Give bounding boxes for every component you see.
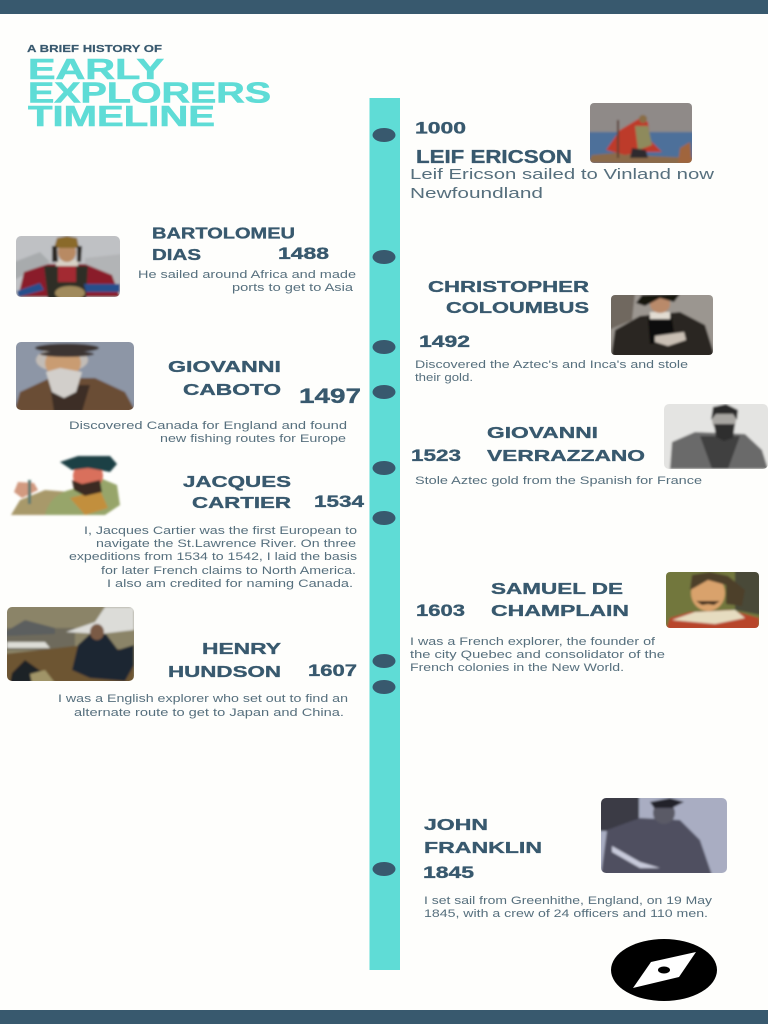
title block: EXPLORERS <box>28 78 271 110</box>
top bar <box>0 0 768 14</box>
name: VERRAZZANO <box>487 448 645 465</box>
panel: Giovanni Caboto <box>14 340 361 445</box>
year: 1845 <box>423 864 474 882</box>
description <box>415 359 688 384</box>
timeline dots <box>372 128 396 876</box>
description: He sailed around Africa and made <box>138 269 356 281</box>
panel: Giovanni Verrazzano <box>411 402 768 487</box>
name <box>428 279 590 317</box>
description: I was a English explorer who set out to find an <box>58 693 348 705</box>
panel: John Franklin <box>423 796 729 920</box>
name <box>491 581 629 620</box>
panel: Henry Hudson <box>5 605 357 719</box>
description <box>69 525 358 590</box>
description: Discovered Canada for England and found <box>69 420 347 432</box>
description: I set sail from Greenhithe, England, on 19 May <box>424 895 713 907</box>
description: expeditions from 1534 to 1542, I laid the basis <box>69 551 358 563</box>
image: Dias portrait <box>16 236 120 297</box>
description <box>69 420 347 445</box>
icon: compass <box>611 939 717 1001</box>
name <box>168 359 281 399</box>
description <box>138 269 356 294</box>
name: GIOVANNI <box>487 425 598 442</box>
description: their gold. <box>415 372 473 384</box>
image: Hudson in boat <box>5 605 136 683</box>
title block: TIMELINE <box>28 101 215 133</box>
description: 1845, with a crew of 24 officers and 110 men. <box>424 908 708 920</box>
description <box>58 693 348 719</box>
name: CABOTO <box>183 382 281 399</box>
description: alternate route to get to Japan and China. <box>74 707 344 719</box>
description <box>410 636 665 674</box>
image: Verrazzano engraving <box>662 402 768 471</box>
name: COLOUMBUS <box>446 300 589 317</box>
description: I also am credited for naming Canada. <box>107 578 353 590</box>
name: SAMUEL DE <box>491 581 623 598</box>
name <box>152 226 295 264</box>
title block <box>27 43 271 133</box>
year: 1497 <box>299 385 361 408</box>
name <box>487 425 645 465</box>
image: Leif Ericson on the shore <box>588 101 694 165</box>
name: CHRISTOPHER <box>428 279 590 296</box>
name: FRANKLIN <box>424 840 542 857</box>
image: Caboto portrait <box>14 340 136 412</box>
description: navigate the St.Lawrence River. On three <box>96 538 356 550</box>
description: I was a French explorer, the founder of <box>410 636 656 648</box>
description: Newfoundland <box>410 185 543 202</box>
panel: Bartolomeu Dias <box>14 226 356 300</box>
description: the city Quebec and consolidator of the <box>410 649 665 661</box>
panel: Jacques Cartier <box>11 456 365 590</box>
panel: Christopher Columbus <box>415 279 715 384</box>
year: 1488 <box>278 245 329 263</box>
description: for later French claims to North America. <box>101 565 356 577</box>
name: CHAMPLAIN <box>491 603 629 620</box>
year: 1492 <box>419 333 470 351</box>
name: BARTOLOMEU <box>152 226 295 242</box>
name: DIAS <box>152 247 201 264</box>
description <box>424 895 713 920</box>
name: JOHN <box>424 817 488 834</box>
year: 1523 <box>411 447 461 465</box>
title block: A BRIEF HISTORY OF <box>27 43 163 55</box>
description: Stole Aztec gold from the Spanish for France <box>415 475 702 487</box>
panel: Leif Ericson <box>410 101 714 202</box>
name: HUNDSON <box>168 664 281 681</box>
image: Franklin photograph <box>599 796 729 875</box>
description: new fishing routes for Europe <box>160 433 346 445</box>
description: Leif Ericson sailed to Vinland now <box>410 166 714 183</box>
name: HENRY <box>202 641 281 658</box>
image: Champlain portrait <box>666 572 759 628</box>
description: French colonies in the New World. <box>410 662 624 674</box>
name: CARTIER <box>192 495 292 512</box>
description: I, Jacques Cartier was the first European to <box>84 525 357 537</box>
year: 1000 <box>415 120 466 138</box>
name <box>168 641 281 681</box>
year: 1607 <box>308 662 357 680</box>
name: GIOVANNI <box>168 359 281 376</box>
name: LEIF ERICSON <box>416 147 572 167</box>
timeline bar <box>370 98 400 970</box>
name <box>183 474 292 512</box>
name <box>424 817 542 857</box>
name: JACQUES <box>183 474 291 491</box>
description <box>410 166 714 202</box>
panel: Samuel de Champlain <box>410 570 761 674</box>
year: 1534 <box>314 493 365 511</box>
description: ports to get to Asia <box>232 282 354 294</box>
title block: EARLY <box>28 54 164 86</box>
bottom bar <box>0 1010 768 1024</box>
year: 1603 <box>416 602 465 620</box>
description: Discovered the Aztec's and Inca's and stole <box>415 359 688 371</box>
image: Columbus portrait <box>609 293 715 357</box>
image: Cartier with globe <box>11 456 120 515</box>
